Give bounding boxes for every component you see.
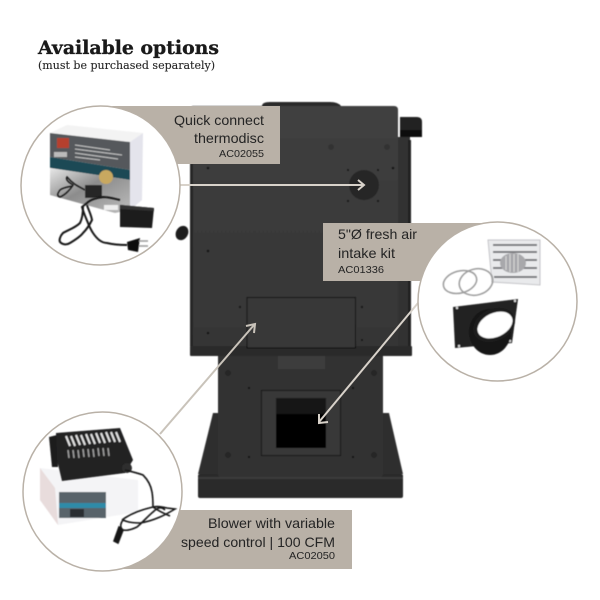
icon: thermodisc control and cable bbox=[58, 177, 154, 252]
label: fresh air intake kit: AC01336 bbox=[338, 264, 384, 276]
label: blower bbox=[110, 510, 352, 569]
arrow: thermodisc bbox=[180, 180, 364, 190]
screw dots bbox=[207, 167, 394, 458]
label: quick connect thermodisc bbox=[112, 106, 280, 164]
stove pedestal bbox=[218, 350, 383, 477]
label: quick connect thermodisc: Quick connect bbox=[174, 112, 264, 128]
circle: fresh air intake kit bbox=[418, 222, 577, 381]
label: blower: AC02050 bbox=[289, 550, 335, 562]
icon: blower cable bbox=[114, 463, 175, 543]
label: quick connect thermodisc: AC02055 bbox=[219, 148, 264, 160]
label: fresh air intake kit: intake kit bbox=[338, 245, 395, 261]
heading: Available options bbox=[37, 37, 219, 59]
stove upper body bbox=[173, 102, 422, 356]
icon: blower housing bbox=[49, 428, 133, 481]
title block bbox=[37, 37, 219, 72]
flue hole bbox=[349, 170, 379, 200]
subheading: (must be purchased separately) bbox=[38, 58, 215, 72]
label: fresh air intake kit: 5"Ø fresh air bbox=[338, 226, 417, 242]
icon: vent grille bbox=[488, 240, 540, 285]
icon: intake flange bbox=[453, 299, 521, 355]
arrow: blower bbox=[160, 324, 255, 434]
label: blower: speed control | 100 CFM bbox=[181, 534, 335, 550]
stove base bbox=[198, 413, 403, 498]
label: fresh air intake kit bbox=[323, 223, 497, 281]
circle: thermodisc kit bbox=[21, 106, 180, 265]
icon: product box bbox=[50, 125, 143, 213]
label: quick connect thermodisc: thermodisc bbox=[194, 130, 264, 146]
stove illustration bbox=[173, 102, 422, 498]
arrow: fresh air intake bbox=[319, 303, 418, 423]
circle: blower kit bbox=[23, 412, 182, 571]
icon: clamp rings bbox=[441, 265, 496, 299]
label: blower: Blower with variable bbox=[208, 515, 335, 531]
icon: blower box bbox=[40, 468, 138, 525]
